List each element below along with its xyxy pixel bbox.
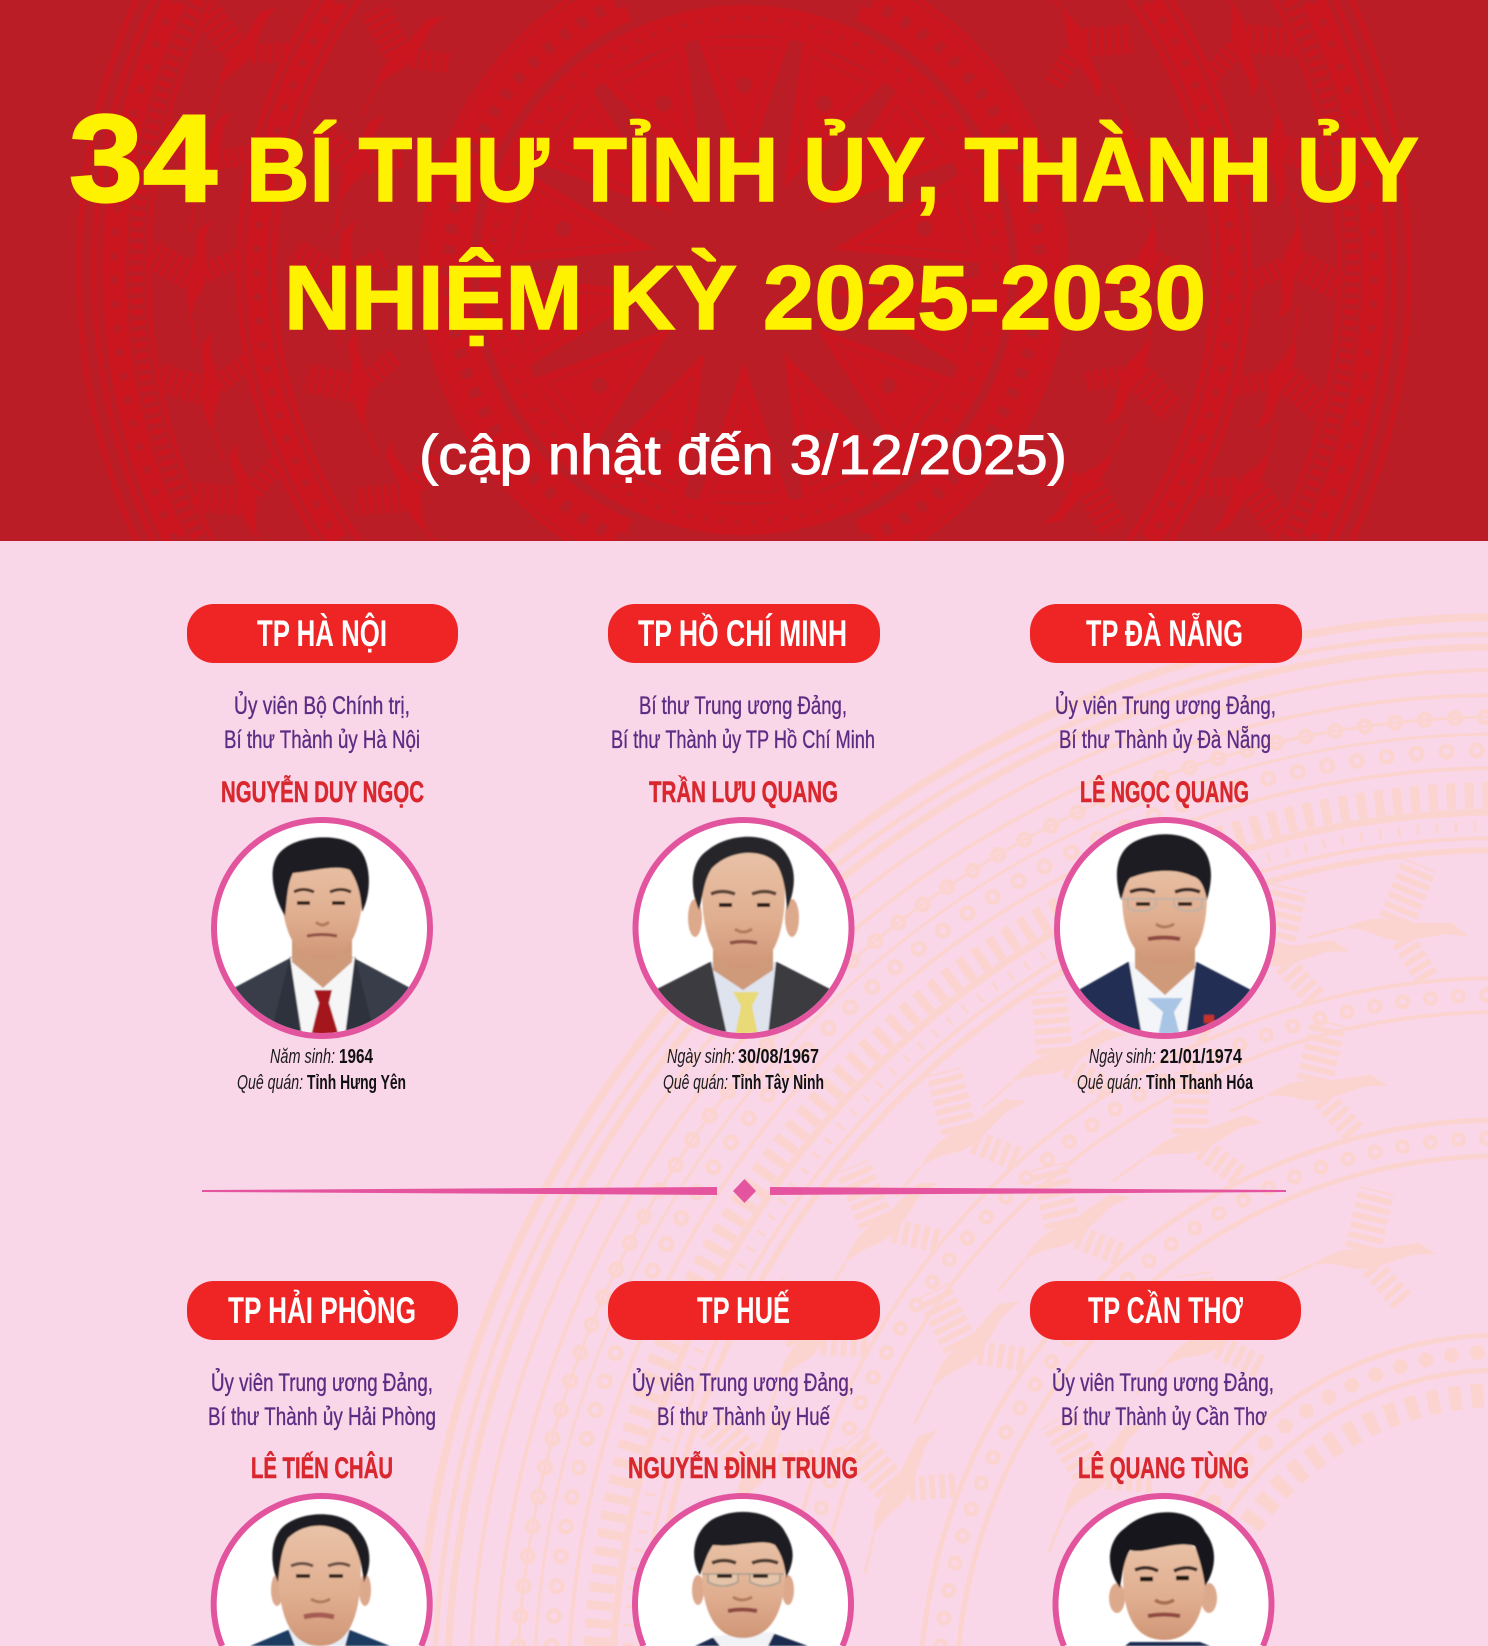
role	[1055, 690, 1276, 754]
details: Quê quán:	[1077, 1072, 1142, 1094]
panel: TP Cần Thơ	[1030, 1281, 1301, 1646]
city pill	[1030, 604, 1302, 663]
details: 1964	[339, 1046, 374, 1068]
panel: TP Hải Phòng	[187, 1281, 458, 1646]
city pill: TP ĐÀ NẴNG	[1086, 613, 1243, 654]
panel: TP Đà Nẵng	[1030, 604, 1302, 1094]
role: Ủy viên Trung ương Đảng,	[1052, 1367, 1274, 1397]
portrait: Trần Lưu Quang	[636, 820, 852, 1036]
subtitle: (cập nhật đến 3/12/2025)	[419, 423, 1067, 486]
city pill	[1030, 1281, 1301, 1340]
details: Quê quán:	[237, 1072, 303, 1094]
role	[208, 1367, 436, 1431]
role: Bí thư Thành ủy Hải Phòng	[208, 1403, 436, 1431]
name: LÊ TIẾN CHÂU	[251, 1451, 393, 1485]
section divider	[202, 1179, 1286, 1203]
city pill: TP HỒ CHÍ MINH	[638, 612, 847, 654]
portrait: Nguyễn Duy Ngọc	[214, 820, 430, 1036]
title line 1: BÍ THƯ TỈNH ỦY, THÀNH ỦY	[246, 119, 1419, 221]
portrait: Nguyễn Đình Trung	[635, 1496, 851, 1646]
panel: TP Huế	[608, 1281, 880, 1646]
city pill	[187, 1281, 458, 1340]
role: Ủy viên Bộ Chính trị,	[234, 690, 410, 720]
role	[224, 690, 420, 754]
city pill: TP HẢI PHÒNG	[228, 1289, 416, 1331]
details: Ngày sinh:	[667, 1046, 735, 1068]
portrait: Lê Tiến Châu	[214, 1496, 430, 1646]
background pattern: bronze drum in header	[79, 0, 1409, 584]
role: Bí thư Thành ủy Huế	[657, 1403, 830, 1431]
role: Bí thư Thành ủy Cần Thơ	[1061, 1403, 1267, 1431]
role: Bí thư Trung ương Đảng,	[639, 692, 847, 720]
background pattern: bronze drum in body	[418, 617, 1488, 1646]
portrait: Lê Ngọc Quang	[1057, 820, 1273, 1036]
title line 1	[69, 90, 1419, 228]
details	[237, 1046, 406, 1094]
role	[1052, 1367, 1274, 1431]
details: 21/01/1974	[1160, 1046, 1243, 1068]
city pill	[608, 1281, 880, 1340]
panel: TP Hồ Chí Minh	[608, 604, 880, 1094]
details: Tỉnh Hưng Yên	[307, 1072, 406, 1094]
details	[1077, 1046, 1254, 1094]
role: Bí thư Thành ủy Hà Nội	[224, 726, 420, 754]
details: Tỉnh Tây Ninh	[732, 1072, 824, 1094]
name: LÊ QUANG TÙNG	[1078, 1451, 1249, 1485]
details: Tỉnh Thanh Hóa	[1146, 1072, 1254, 1094]
title line 1: 34	[69, 90, 217, 228]
city pill	[187, 604, 458, 663]
role: Bí thư Thành ủy TP Hồ Chí Minh	[611, 726, 875, 754]
name: NGUYỄN DUY NGỌC	[221, 775, 424, 809]
details: 30/08/1967	[738, 1046, 819, 1068]
city pill	[608, 604, 880, 663]
name: LÊ NGỌC QUANG	[1080, 775, 1249, 809]
panel: red header	[0, 0, 1488, 584]
panel: TP Hà Nội	[187, 604, 458, 1094]
title line 2: NHIỆM KỲ 2025-2030	[284, 247, 1206, 349]
city pill: TP HÀ NỘI	[257, 612, 387, 654]
role: Ủy viên Trung ương Đảng,	[1055, 690, 1276, 720]
role	[632, 1367, 854, 1431]
city pill: TP CẦN THƠ	[1088, 1290, 1243, 1331]
name: NGUYỄN ĐÌNH TRUNG	[628, 1451, 858, 1485]
details: Năm sinh:	[270, 1046, 335, 1068]
role: Bí thư Thành ủy Đà Nẵng	[1059, 725, 1271, 754]
role	[611, 692, 875, 754]
name: TRẦN LƯU QUANG	[649, 775, 838, 809]
portrait: Lê Quang Tùng	[1056, 1496, 1272, 1646]
role: Ủy viên Trung ương Đảng,	[211, 1367, 433, 1397]
details: Ngày sinh:	[1089, 1046, 1156, 1068]
details: Quê quán:	[663, 1072, 728, 1094]
details	[663, 1046, 824, 1094]
city pill: TP HUẾ	[697, 1290, 790, 1331]
role: Ủy viên Trung ương Đảng,	[632, 1367, 854, 1397]
